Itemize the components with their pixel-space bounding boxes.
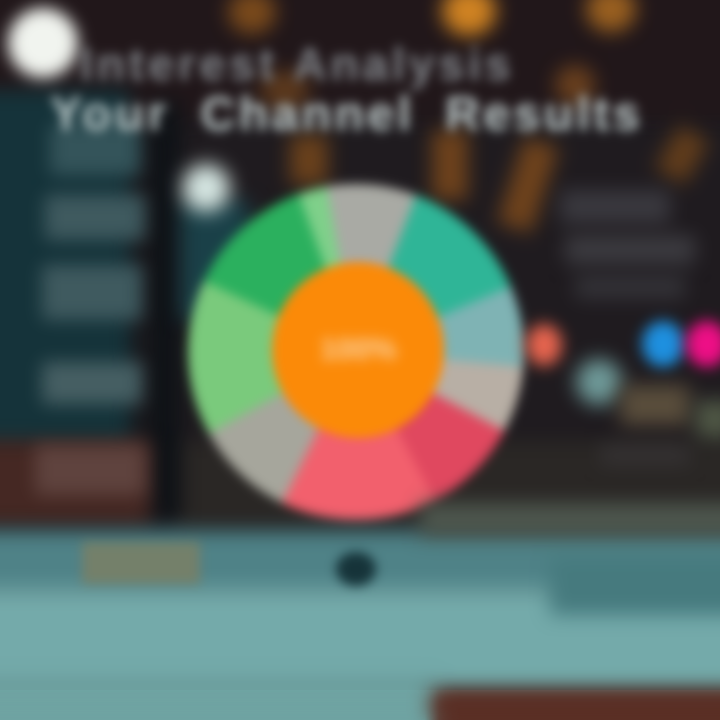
title line 1: Interest Analysis <box>80 38 514 90</box>
legend pills <box>632 310 720 378</box>
legend rows <box>564 346 720 460</box>
title line 2: Your Channel Results <box>50 88 643 141</box>
donut ring segments <box>188 184 524 520</box>
bottom label plate <box>82 542 200 584</box>
counter <box>0 488 720 720</box>
donut chart <box>180 176 532 528</box>
bokeh lights <box>218 0 714 241</box>
callout marker <box>526 324 562 366</box>
bottom dark dot <box>336 552 376 586</box>
blue pill <box>642 321 684 367</box>
title <box>46 38 645 141</box>
right panel rows <box>555 184 700 303</box>
donut centre <box>272 262 444 438</box>
logo blob <box>8 8 78 78</box>
pink pill <box>686 321 720 367</box>
small marker icon <box>182 164 230 212</box>
left panel rows <box>31 120 154 499</box>
centre label: 100% <box>320 333 397 366</box>
